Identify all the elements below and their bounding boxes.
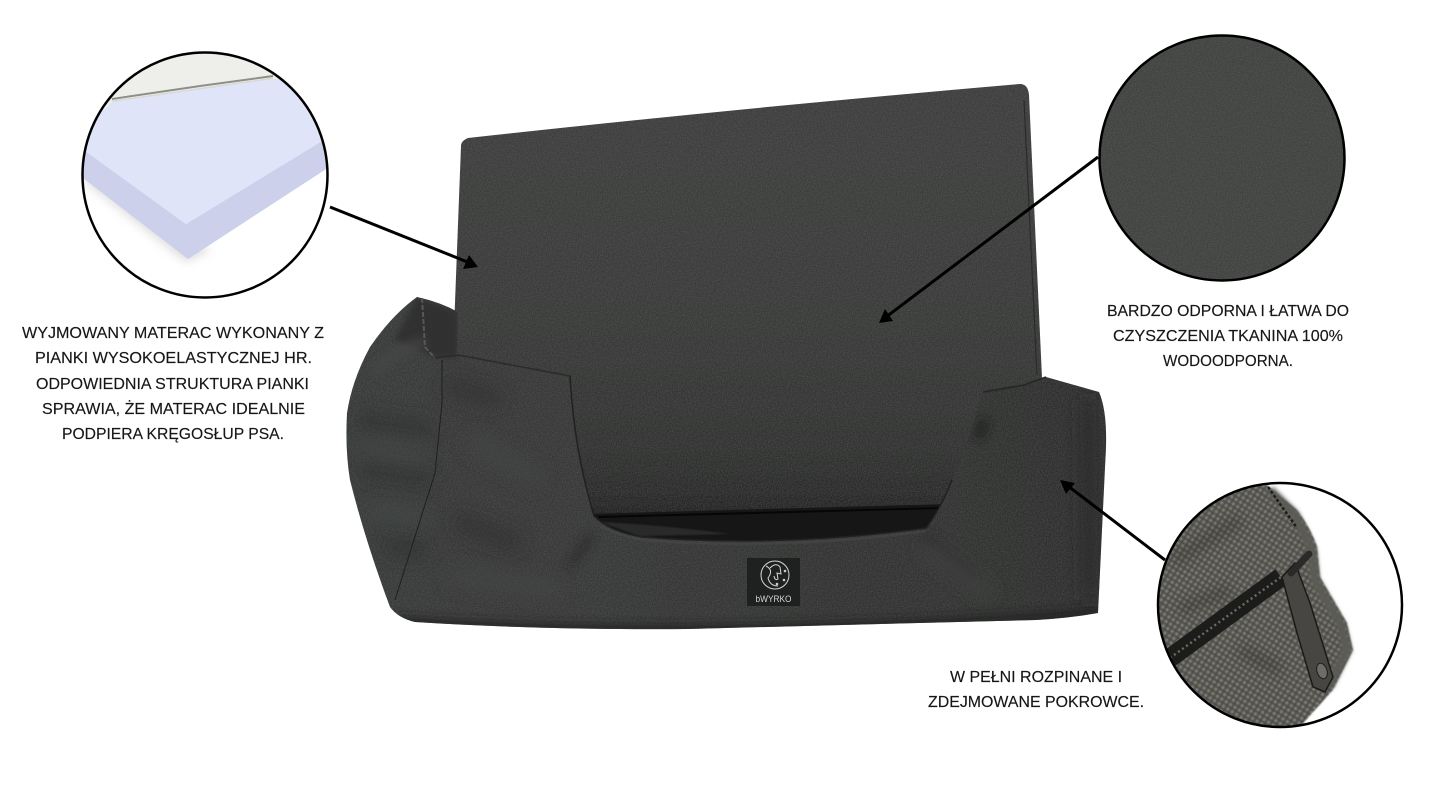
arrow: foam to cushion	[330, 207, 478, 269]
right arm seam	[983, 377, 1046, 392]
logo: moon with dog	[761, 561, 789, 589]
mattress cover	[105, 54, 278, 106]
text: foam description	[22, 325, 324, 443]
rear left arm	[395, 297, 458, 358]
product: dog bed	[346, 84, 1106, 630]
text: foam description: PIANKI WYSOKOELASTYCZNEJ HR.	[35, 350, 312, 367]
cushion side piping	[1024, 100, 1037, 375]
text: fabric description	[1107, 303, 1349, 370]
bottom shade	[395, 614, 1100, 630]
lip edge	[570, 376, 952, 541]
text: foam description: WYJMOWANY MATERAC WYKONANY Z	[22, 325, 324, 342]
text: foam description: ODPOWIEDNIA STRUKTURA PIANKI	[36, 376, 309, 393]
right arm folds	[1088, 400, 1090, 600]
circle: zipper detail	[1150, 480, 1405, 730]
darker stitched edge	[1270, 490, 1347, 686]
shading inside base outline	[358, 297, 1100, 630]
circle: foam mattress detail	[70, 50, 340, 300]
fabric folds	[360, 385, 520, 552]
dark weave patches	[1175, 520, 1280, 670]
foam top	[86, 78, 322, 224]
foam shadow	[84, 179, 209, 264]
zipper teeth	[1170, 577, 1281, 658]
arrow: fabric to cushion	[879, 157, 1098, 323]
back cushion	[453, 84, 1042, 530]
text: foam description: PODPIERA KRĘGOSŁUP PSA.	[62, 426, 284, 443]
text: zipper description	[928, 669, 1144, 711]
seat cushion	[600, 522, 730, 536]
text: fabric description: WODOODPORNA.	[1163, 353, 1293, 370]
left arm seams	[395, 360, 442, 600]
circle: waterproof fabric detail	[1100, 36, 1344, 280]
fabric weave	[1150, 480, 1353, 730]
seat shadow	[585, 504, 950, 570]
brand label	[747, 558, 800, 606]
base of the bed	[346, 297, 1106, 630]
zipper pull	[1282, 563, 1333, 692]
brand name: bWYRKO	[756, 594, 792, 604]
text: fabric description: CZYSZCZENIA TKANINA 100%	[1113, 328, 1343, 345]
foam side	[84, 142, 326, 259]
text: zipper description: ZDEJMOWANE POKROWCE.	[928, 694, 1144, 711]
creases at the lip corners	[568, 535, 962, 566]
text: zipper description: W PEŁNI ROZPINANE I	[950, 669, 1122, 686]
text: foam description: SPRAWIA, ŻE MATERAC IDEALNIE	[42, 399, 305, 418]
arrow: zipper to arm	[1060, 480, 1165, 560]
text: fabric description: BARDZO ODPORNA I ŁATWA DO	[1107, 303, 1349, 320]
